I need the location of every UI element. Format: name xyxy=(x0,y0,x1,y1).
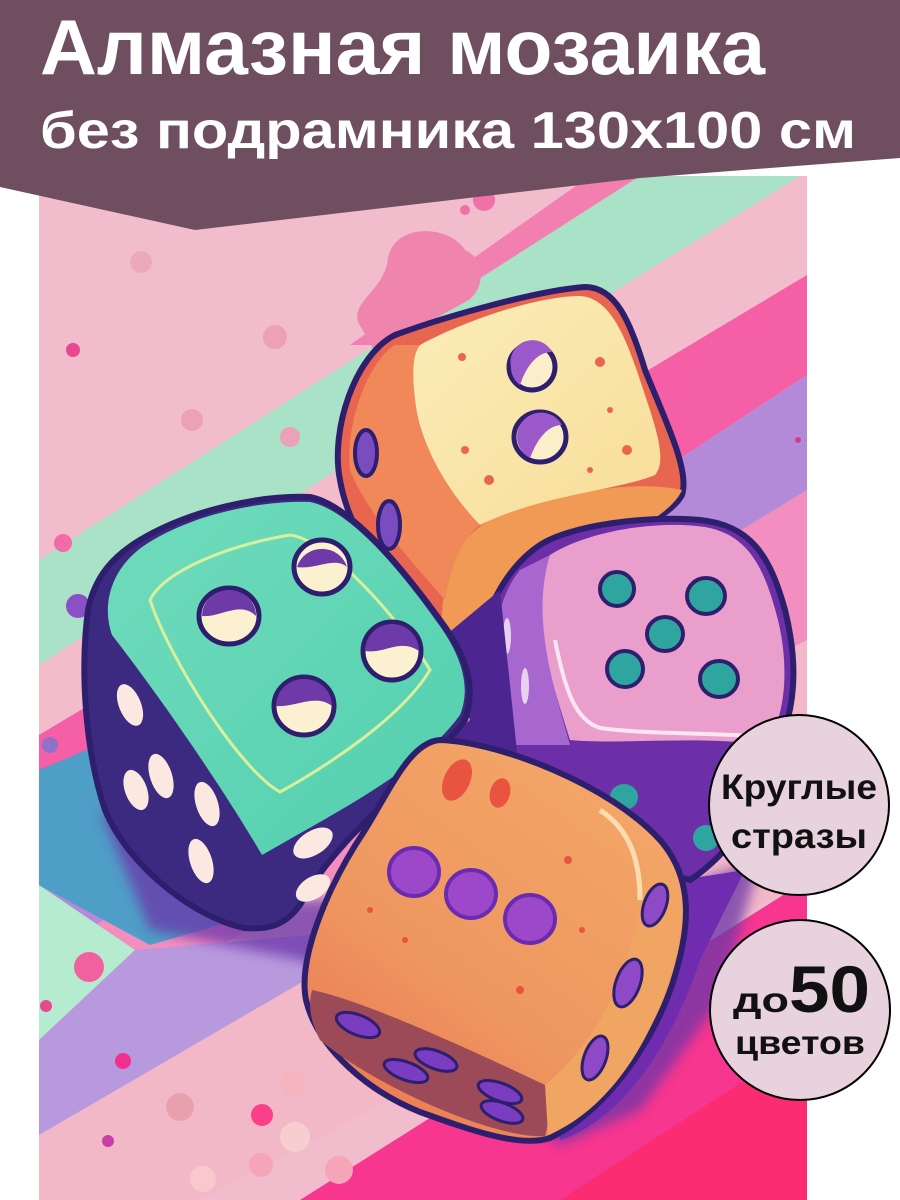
badge: round rhinestones: Круглые xyxy=(721,768,877,807)
poster artwork: dice xyxy=(39,176,807,1200)
paint splashes xyxy=(40,189,801,1192)
badge: round rhinestones xyxy=(709,715,889,895)
die: green four xyxy=(84,497,470,928)
badge: up to 50 colours xyxy=(710,920,890,1100)
badge: up to 50 colours: цветов xyxy=(735,1024,865,1061)
die: pink five xyxy=(474,519,793,880)
badge: round rhinestones: стразы xyxy=(731,817,867,856)
die: yellow two xyxy=(338,287,684,640)
background stripes xyxy=(39,176,807,1200)
badge: up to 50 colours: до xyxy=(733,981,789,1020)
badge: up to 50 colours: 50 xyxy=(789,952,870,1026)
dark filler between dice xyxy=(451,590,517,753)
die: orange three xyxy=(305,740,686,1141)
dice shadow xyxy=(100,810,760,1145)
subtitle: без подрамника 130х100 см xyxy=(40,102,856,160)
title: Алмазная мозаика xyxy=(40,3,766,91)
header banner xyxy=(0,0,900,230)
